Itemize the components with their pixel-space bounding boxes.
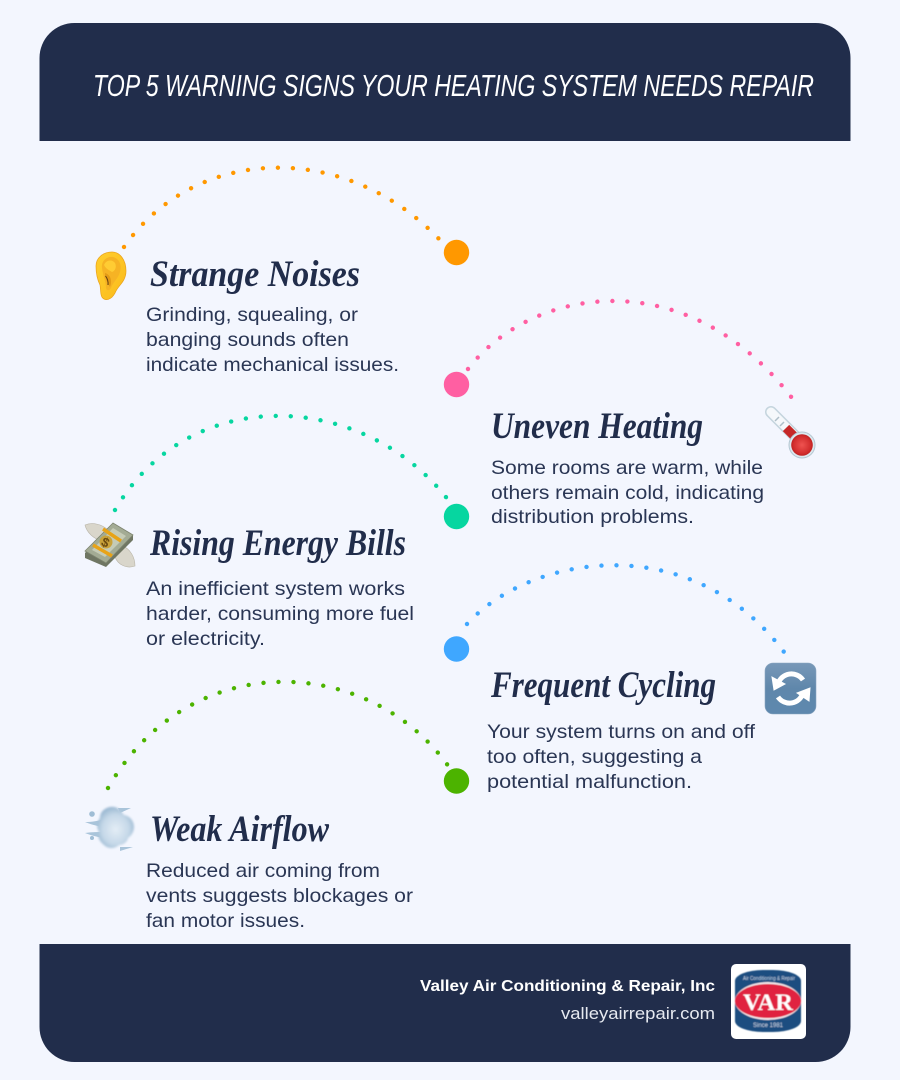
description: uneven heating [491, 457, 764, 528]
description: strange noises: Grinding, squealing, or [146, 304, 359, 326]
icon: thermometer [771, 412, 815, 458]
logo: Since 1981 [753, 1023, 784, 1029]
description: weak airflow [146, 860, 414, 932]
description: uneven heating: distribution problems. [491, 506, 694, 528]
panel: strange noises [96, 168, 469, 376]
description: uneven heating: Some rooms are warm, while [491, 457, 763, 479]
icon: cycle arrows [765, 663, 816, 714]
node: rising energy bills [444, 504, 469, 529]
heading: uneven heating: Uneven Heating [491, 406, 703, 447]
dotted arc: uneven heating [468, 301, 792, 398]
logo: Air Conditioning & Repair [743, 976, 795, 982]
icon: wind cloud [85, 807, 134, 851]
heading: weak airflow: Weak Airflow [150, 809, 329, 850]
heading: strange noises: Strange Noises [150, 254, 360, 295]
dotted arc: strange noises [124, 168, 440, 247]
description: weak airflow: fan motor issues. [146, 910, 305, 932]
dotted arc: frequent cycling [467, 565, 784, 652]
description: strange noises: banging sounds often [146, 329, 349, 351]
node: frequent cycling [444, 636, 469, 662]
description: rising energy bills: or electricity. [146, 628, 265, 650]
website: valleyairrepair.com [561, 1005, 715, 1023]
description: rising energy bills: harder, consuming more fuel [146, 603, 414, 625]
panel: rising energy bills [85, 416, 469, 650]
description: frequent cycling [487, 721, 756, 793]
description: weak airflow: vents suggests blockages or [146, 885, 414, 907]
node: uneven heating [444, 372, 469, 397]
description: strange noises: indicate mechanical issues. [146, 354, 399, 376]
footer banner [40, 944, 850, 1062]
description: rising energy bills [146, 578, 414, 650]
logo: VAR [743, 990, 793, 1015]
description: strange noises [146, 304, 399, 376]
panel: weak airflow [85, 682, 469, 932]
description: frequent cycling: potential malfunction. [487, 771, 692, 793]
icon: money with wings: $ [99, 534, 113, 551]
icon: money with wings [85, 523, 135, 567]
dotted arc: rising energy bills [115, 416, 449, 510]
node: strange noises [444, 240, 469, 265]
heading: rising energy bills: Rising Energy Bills [149, 523, 406, 564]
description: frequent cycling: too often, suggesting a [487, 746, 702, 768]
icon: ear [96, 252, 126, 300]
description: weak airflow: Reduced air coming from [146, 860, 380, 882]
panel: uneven heating [444, 301, 815, 528]
description: frequent cycling: Your system turns on and off [487, 721, 756, 743]
panel: frequent cycling [444, 565, 816, 793]
description: uneven heating: others remain cold, indicating [491, 482, 764, 504]
header banner [40, 23, 850, 141]
cloud puff [97, 807, 134, 848]
dotted arc: weak airflow [108, 682, 449, 788]
logo [731, 964, 806, 1039]
node: weak airflow [444, 768, 469, 794]
description: rising energy bills: An inefficient system works [146, 578, 405, 600]
company name: Valley Air Conditioning & Repair, Inc [420, 978, 715, 995]
heading: frequent cycling: Frequent Cycling [490, 665, 716, 706]
